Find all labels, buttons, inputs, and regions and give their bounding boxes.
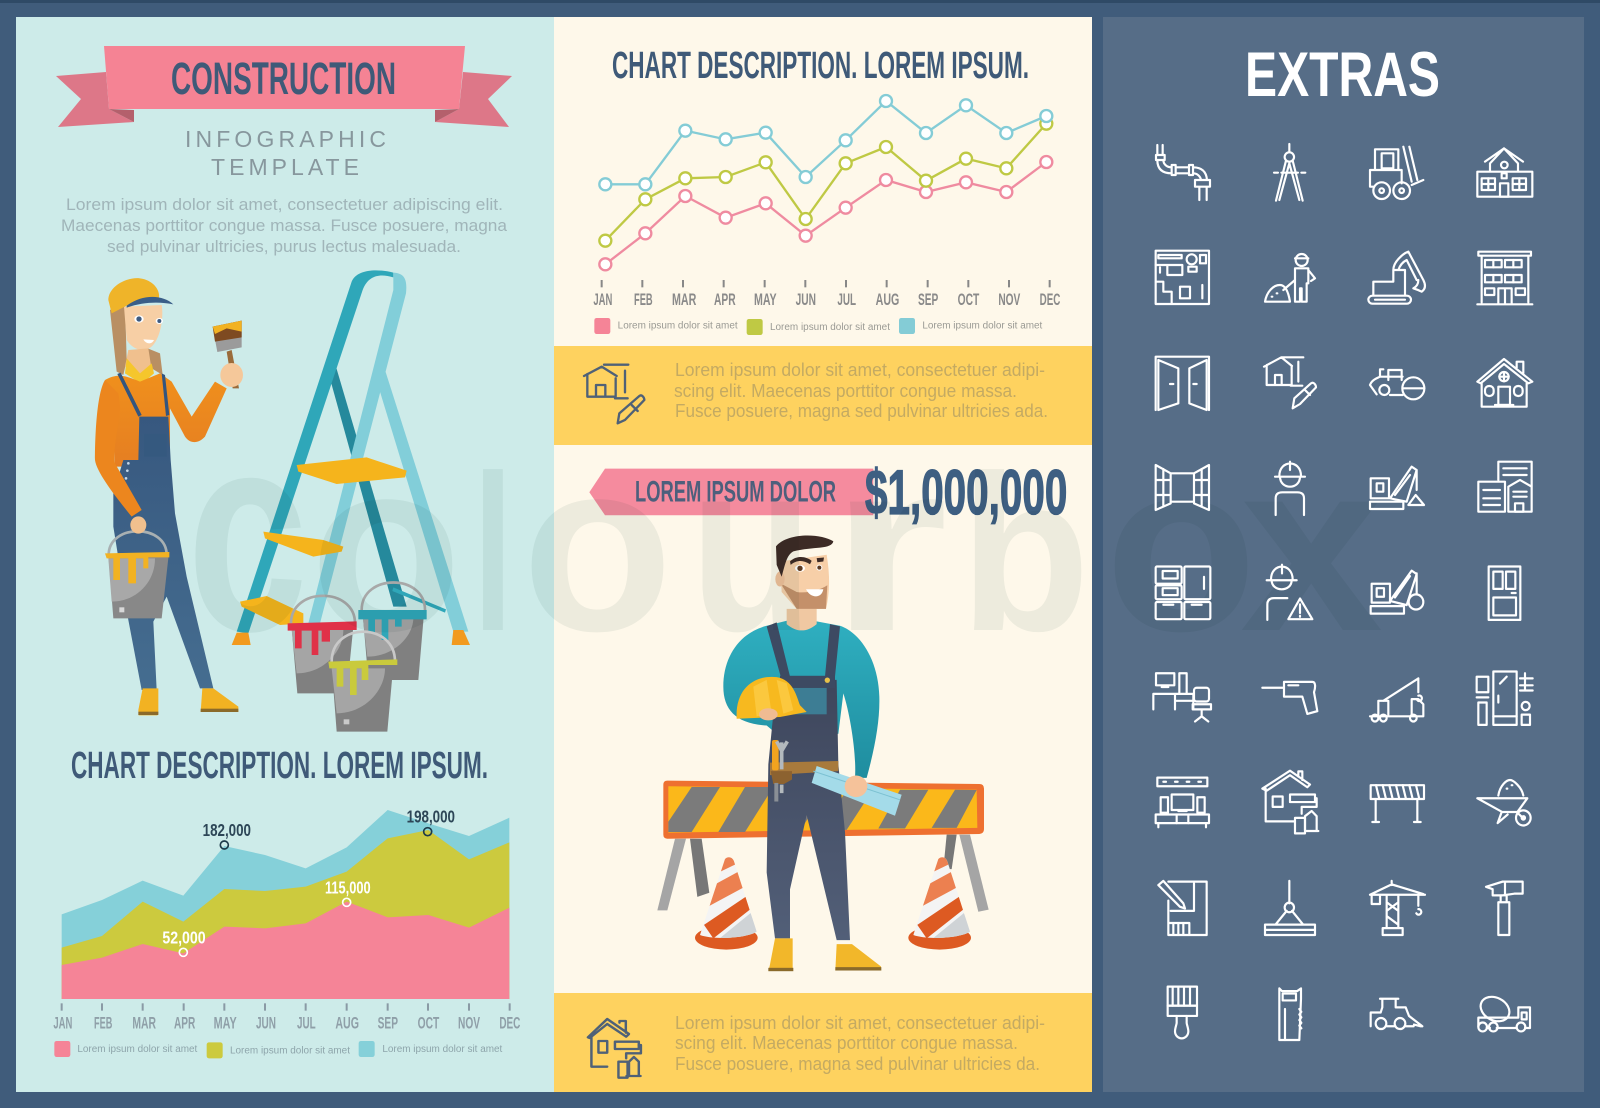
watermark text: r <box>830 411 948 682</box>
line chart month labels: JUN <box>796 290 816 309</box>
area chart month labels: MAR <box>132 1013 156 1032</box>
line chart month labels: APR <box>714 290 736 309</box>
icon: worker with helmet <box>1275 462 1305 515</box>
watermark text: u <box>690 411 813 682</box>
price banner: $1,000,000 <box>865 458 1067 528</box>
yellow callout band 1: Lorem ipsum dolor sit amet, consectetuer adipi- <box>675 360 1045 380</box>
teal paint bucket <box>358 582 427 680</box>
line chart month labels: MAR <box>672 290 696 309</box>
icon: crawler crane <box>1370 467 1424 509</box>
right cone <box>908 854 973 950</box>
icon: excavator <box>1368 252 1425 304</box>
area chart legend <box>54 1041 503 1058</box>
line chart legend: Lorem ipsum dolor sit amet <box>618 320 738 331</box>
icon: hoist with beam <box>1265 881 1315 935</box>
illustration: construction worker with barrier and cones <box>657 535 989 971</box>
road barrier <box>657 781 989 912</box>
line chart month labels: JAN <box>593 290 612 309</box>
icon: wheelbarrow <box>1477 780 1531 825</box>
woman painter <box>95 278 243 715</box>
icon: apartment block <box>1477 252 1532 304</box>
area chart month labels: APR <box>174 1013 195 1032</box>
intro paragraph <box>61 195 508 256</box>
ribbon banner with title <box>56 46 512 127</box>
area chart month labels: MAY <box>214 1013 237 1032</box>
intro paragraph: sed pulvinar ultricies, purus lectus malesuada. <box>107 237 461 256</box>
icon: worker warning <box>1267 565 1312 620</box>
line chart month labels: MAY <box>754 290 777 309</box>
icon: office desk and chair <box>1153 673 1211 721</box>
yellow callout band 1: scing elit. Maecenas porttitor congue massa. <box>674 381 1017 401</box>
line chart month labels: JUL <box>837 290 856 309</box>
extras heading: EXTRAS <box>1245 40 1440 110</box>
price banner <box>589 458 1067 528</box>
area series pink <box>62 902 509 999</box>
watermark text: o <box>522 411 673 682</box>
icon: window <box>1156 465 1209 510</box>
icon: loader <box>1371 999 1422 1029</box>
ribbon banner with title: CONSTRUCTION <box>171 53 396 104</box>
yellow callout band 1 <box>554 346 1092 445</box>
data point markers and values: 115,000 <box>325 877 371 897</box>
line chart month labels: DEC <box>1040 290 1060 309</box>
line series blue <box>599 95 1052 190</box>
line chart month labels: AUG <box>876 290 899 309</box>
intro paragraph: Lorem ipsum dolor sit amet, consectetuer adipiscing elit. <box>66 195 503 214</box>
icon: school building <box>1477 148 1532 197</box>
yellow callout band 2 <box>554 993 1092 1092</box>
icon: double doors <box>1156 357 1209 410</box>
watermark text: l <box>473 430 513 678</box>
area chart month labels: NOV <box>458 1013 480 1032</box>
watermark text: c <box>187 374 308 690</box>
area chart <box>53 807 520 1058</box>
icon: blueprint and pencil <box>1158 881 1207 935</box>
icon: wrecking crane <box>1371 571 1423 614</box>
icon: kitchen cabinets <box>1156 566 1210 619</box>
yellow callout band 2: scing elit. Maecenas porttitor congue massa. <box>675 1033 1018 1053</box>
watermark text: b <box>960 430 1090 678</box>
left chart title: CHART DESCRIPTION. LOREM IPSUM. <box>71 745 488 787</box>
yellow callout band 1: Fusce posuere, magna sed pulvinar ultricies ada. <box>675 401 1048 421</box>
icon: house with roller <box>1262 771 1318 833</box>
red paint bucket <box>288 596 357 693</box>
line chart legend: Lorem ipsum dolor sit amet <box>770 322 890 333</box>
line chart month labels: OCT <box>958 290 980 309</box>
line series olive <box>599 118 1052 247</box>
area chart month labels: OCT <box>418 1013 440 1032</box>
icon grid lower rows <box>1153 565 1533 1040</box>
icon: hammer <box>1486 882 1523 935</box>
icon: tv unit <box>1156 778 1209 827</box>
line chart month labels: FEB <box>634 290 653 309</box>
panel: middle background <box>554 17 1092 1092</box>
yellow callout band 2: Fusce posuere, magna sed pulvinar ultricies da. <box>675 1054 1040 1074</box>
watermark text: o <box>1105 411 1257 682</box>
line chart legend <box>594 318 1043 335</box>
subtitle: INFOGRAPHIC <box>185 126 386 152</box>
icon: tower crane <box>1370 881 1425 935</box>
area chart legend: Lorem ipsum dolor sit amet <box>382 1044 503 1055</box>
data point markers and values: 52,000 <box>162 927 206 947</box>
illustration: woman painter with ladder and buckets <box>95 270 470 732</box>
line chart ticks <box>601 280 1051 287</box>
line chart <box>593 95 1060 335</box>
icon: barrier <box>1371 785 1424 822</box>
icon: interior fixtures <box>1477 672 1533 725</box>
line chart legend: Lorem ipsum dolor sit amet <box>922 320 1043 331</box>
man worker <box>723 535 902 971</box>
icon: pipe <box>1156 145 1210 200</box>
yellow callout band 2: Lorem ipsum dolor sit amet, consectetuer adipi- <box>675 1013 1045 1033</box>
icon grid upper rows <box>1156 144 1532 515</box>
subtitle <box>185 126 386 180</box>
area chart ticks <box>61 1003 511 1011</box>
icon: crane truck <box>1370 678 1423 721</box>
data point markers and values <box>162 807 455 956</box>
ladder <box>232 270 470 645</box>
data point markers and values: 182,000 <box>203 820 251 840</box>
line chart month labels: SEP <box>918 290 938 309</box>
area chart month labels: JAN <box>53 1013 72 1032</box>
price banner: LOREM IPSUM DOLOR <box>635 475 836 508</box>
intro paragraph: Maecenas porttitor congue massa. Fusce posuere, magna <box>61 216 508 235</box>
watermark text: x <box>1240 411 1383 682</box>
icon: power drill <box>1262 682 1317 714</box>
area chart month labels: FEB <box>94 1013 112 1032</box>
icon: hand saw <box>1279 988 1301 1040</box>
icon: buildings <box>1478 462 1532 512</box>
line series pink <box>599 156 1052 270</box>
area chart month labels <box>53 1013 520 1032</box>
icon: cement mixer <box>1477 992 1530 1031</box>
area chart legend: Lorem ipsum dolor sit amet <box>77 1044 198 1055</box>
icon: worker digging <box>1265 254 1315 302</box>
top chart title: CHART DESCRIPTION. LOREM IPSUM. <box>612 45 1029 87</box>
area series olive <box>62 830 509 999</box>
subtitle: TEMPLATE <box>211 154 359 180</box>
area chart month labels: JUL <box>297 1013 316 1032</box>
line chart month labels: NOV <box>998 290 1021 309</box>
icon: paint brush <box>1168 987 1197 1038</box>
icon: house with pencil <box>1264 357 1316 408</box>
area chart month labels: DEC <box>499 1013 520 1032</box>
watermark text: o <box>310 411 462 682</box>
area series blue <box>62 810 509 999</box>
icon: forklift <box>1370 147 1423 199</box>
panel: right extras background <box>1103 17 1584 1092</box>
green paint bucket <box>328 632 397 732</box>
area chart month labels: SEP <box>378 1013 398 1032</box>
area chart legend: Lorem ipsum dolor sit amet <box>230 1045 350 1056</box>
icon: floor plan <box>1156 251 1209 304</box>
icon: panel door <box>1489 566 1520 620</box>
icon: road roller <box>1370 369 1424 399</box>
data point markers and values: 198,000 <box>407 807 455 827</box>
line chart month labels <box>593 290 1060 309</box>
area chart month labels: JUN <box>256 1013 276 1032</box>
left cone <box>695 854 760 950</box>
icon: drafting compass <box>1274 144 1305 201</box>
panel: left background <box>16 17 554 1092</box>
area chart month labels: AUG <box>335 1013 359 1032</box>
icon: house <box>1477 359 1532 407</box>
